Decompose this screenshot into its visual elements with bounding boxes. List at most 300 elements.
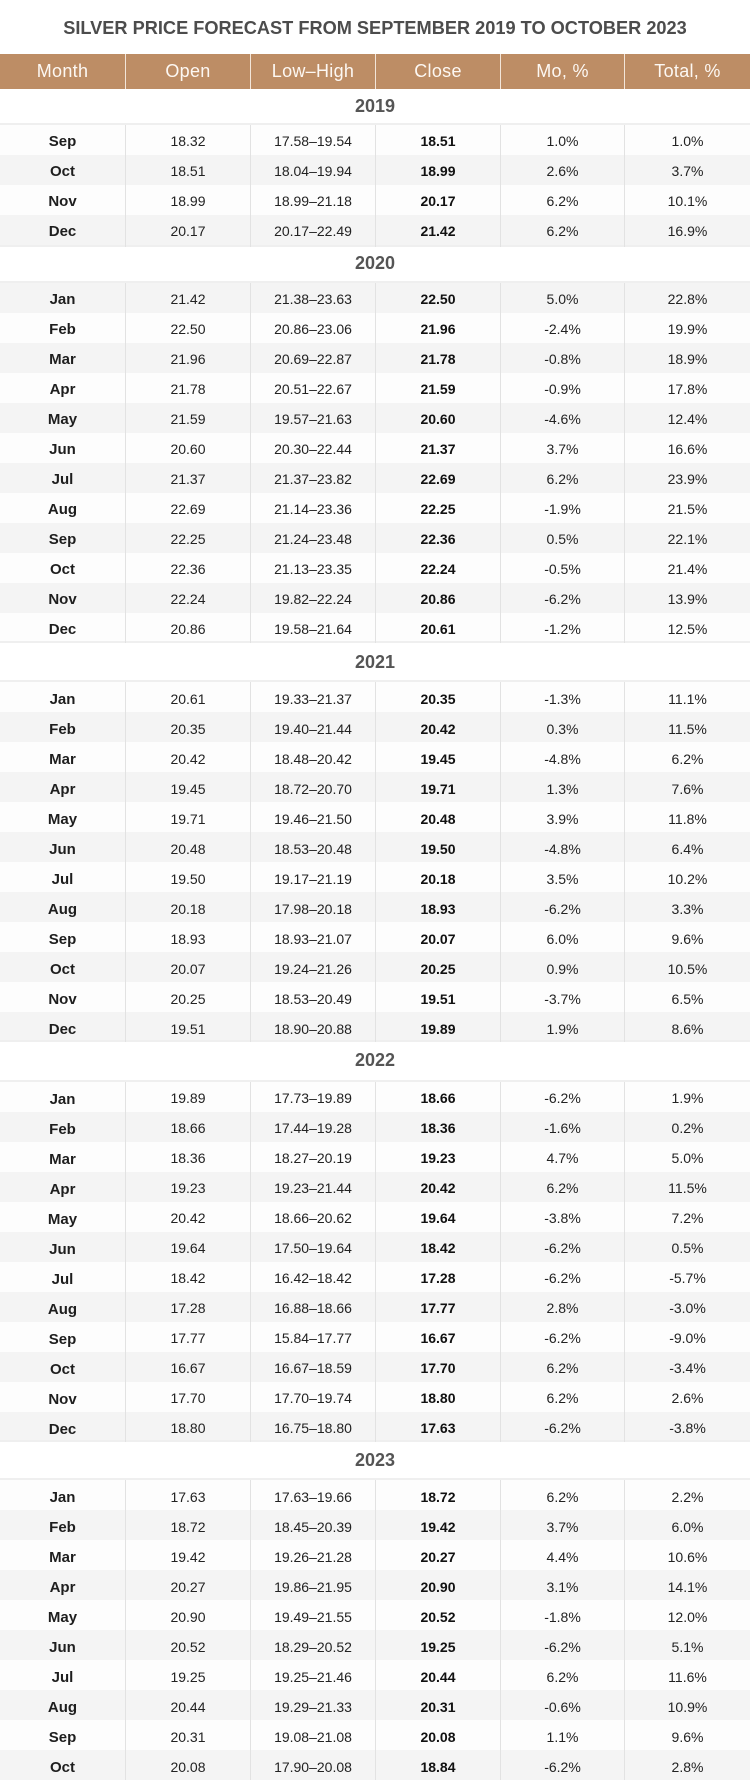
section: 2021 rows: 20.07: [420, 931, 456, 947]
section: 2019 rows: 16.9%: [668, 223, 707, 239]
section: 2023 rows: 19.42: [420, 1519, 456, 1535]
section: 2021 rows: 8.6%: [672, 1021, 703, 1037]
section: 2020 rows: May: [48, 411, 77, 428]
section: 2021 rows: Apr: [50, 781, 75, 798]
section: 2022 rows: 0.5%: [672, 1240, 703, 1256]
section: 2020 rows: 12.5%: [668, 621, 707, 637]
section: 2021 rows: 18.93–21.07: [274, 931, 352, 947]
section: 2019 rows: 18.99: [420, 163, 456, 179]
section: 2021 rows: 19.71: [420, 781, 456, 797]
section: 2020 rows: -0.5%: [544, 561, 581, 577]
section: 2019 rows: 10.1%: [668, 193, 707, 209]
section: 2020 rows: 23.9%: [668, 471, 707, 487]
section: 2023 rows: 20.08: [420, 1729, 456, 1745]
section: 2022 rows: 17.77: [420, 1300, 456, 1316]
section: 2021 rows: 20.35: [420, 691, 456, 707]
section: 2022 rows: 18.80: [420, 1390, 456, 1406]
section: 2022 rows: -3.0%: [669, 1300, 706, 1316]
section: 2019 rows: Sep: [49, 133, 76, 150]
section: 2023 rows: 20.52: [170, 1639, 206, 1655]
section: 2023 rows: 14.1%: [668, 1579, 707, 1595]
section: 2020 rows: 20.69–22.87: [274, 351, 352, 367]
section: 2022 rows: Jan: [50, 1091, 75, 1108]
section: 2021 rows: Mar: [49, 751, 76, 768]
section: 2023 rows: Jul: [52, 1669, 73, 1686]
section: 2020 rows: 19.82–22.24: [274, 591, 352, 607]
section: 2021 rows: Jun: [49, 841, 76, 858]
section: 2023 rows: [0, 1478, 750, 1780]
section: 2022 rows: 16.67: [420, 1330, 456, 1346]
section: 2022 rows: 17.70–19.74: [274, 1390, 352, 1406]
section: 2020 rows: Apr: [50, 381, 75, 398]
section: 2021 rows: 20.42: [170, 751, 206, 767]
section: 2023 rows: 2.2%: [672, 1489, 703, 1505]
section: 2022 rows: May: [48, 1211, 77, 1228]
section: 2021 rows: Dec: [49, 1021, 76, 1038]
section: 2022 rows: 17.77: [170, 1330, 206, 1346]
section: 2021 rows: 0.3%: [547, 721, 578, 737]
section: 2023 rows: 19.86–21.95: [274, 1579, 352, 1595]
section: 2021 rows: 19.17–21.19: [274, 871, 352, 887]
section: 2023 rows: 9.6%: [672, 1729, 703, 1745]
section: 2021 rows: 7.6%: [672, 781, 703, 797]
section: 2021 rows: 11.1%: [668, 691, 707, 707]
section: 2022 rows: 17.28: [420, 1270, 456, 1286]
section: 2020 rows: Jul: [52, 471, 73, 488]
section: 2020 rows: 20.60: [420, 411, 456, 427]
section: 2019 rows: 18.04–19.94: [274, 163, 352, 179]
section: 2021 rows: Feb: [49, 721, 76, 738]
year heading: 2019: [0, 89, 750, 123]
section: 2022 rows: 18.66: [420, 1090, 456, 1106]
title: SILVER PRICE FORECAST FROM SEPTEMBER 2019 TO OCTOBER 2023: [63, 18, 687, 38]
section: 2023 rows: 20.08: [170, 1759, 206, 1775]
section: 2020 rows: 22.25: [420, 501, 456, 517]
year heading: 2019: 2019: [355, 96, 395, 116]
section: 2020 rows: Jun: [49, 441, 76, 458]
section: 2021 rows: 10.2%: [668, 871, 707, 887]
section: 2021 rows: 19.24–21.26: [274, 961, 352, 977]
section: 2020 rows: 22.69: [420, 471, 456, 487]
section: 2019 rows: 18.51: [170, 163, 206, 179]
section: 2023 rows: 18.29–20.52: [274, 1639, 352, 1655]
section: 2022 rows: 17.50–19.64: [274, 1240, 352, 1256]
section: 2023 rows: -1.8%: [544, 1609, 581, 1625]
section: 2021 rows: 10.5%: [668, 961, 707, 977]
section: 2022 rows: 19.64: [420, 1210, 456, 1226]
section: 2023 rows: 18.45–20.39: [274, 1519, 352, 1535]
section: 2022 rows: 16.67: [170, 1360, 206, 1376]
section: 2023 rows: Jun: [49, 1639, 76, 1656]
section: 2020 rows: -4.6%: [544, 411, 581, 427]
section: 2021 rows: 20.42: [420, 721, 456, 737]
section: 2022 rows: Apr: [50, 1181, 75, 1198]
table header: [0, 54, 750, 89]
section: 2023 rows: Apr: [50, 1579, 75, 1596]
section: 2021 rows: 20.25: [170, 991, 206, 1007]
section: 2020 rows: 21.59: [420, 381, 456, 397]
table header: Mo, %: [536, 61, 589, 81]
section: 2021 rows: 19.40–21.44: [274, 721, 352, 737]
section: 2020 rows: -0.8%: [544, 351, 581, 367]
section: 2021 rows: 18.90–20.88: [274, 1021, 352, 1037]
section: 2019 rows: [0, 123, 750, 247]
section: 2023 rows: 4.4%: [547, 1549, 578, 1565]
section: 2020 rows: Mar: [49, 351, 76, 368]
section: 2019 rows: Nov: [48, 193, 77, 210]
section: 2023 rows: 6.2%: [547, 1489, 578, 1505]
section: 2022 rows: 1.9%: [672, 1090, 703, 1106]
section: 2023 rows: 19.26–21.28: [274, 1549, 352, 1565]
section: 2019 rows: 20.17: [420, 193, 456, 209]
section: 2021 rows: 19.71: [170, 811, 206, 827]
section: 2022 rows: Jul: [52, 1271, 73, 1288]
section: 2022 rows: 17.44–19.28: [274, 1120, 352, 1136]
section: 2022 rows: -6.2%: [544, 1420, 581, 1436]
section: 2023 rows: Jan: [50, 1489, 75, 1506]
section: 2022 rows: 17.73–19.89: [274, 1090, 352, 1106]
section: 2020 rows: 22.25: [170, 531, 206, 547]
section: 2020 rows: 21.37–23.82: [274, 471, 352, 487]
section: 2022 rows: 17.63: [420, 1420, 456, 1436]
section: 2020 rows: 20.51–22.67: [274, 381, 352, 397]
section: 2022 rows: 20.42: [420, 1180, 456, 1196]
section: 2023 rows: -6.2%: [544, 1639, 581, 1655]
section: 2020 rows: 21.38–23.63: [274, 291, 352, 307]
section: 2022 rows: 18.80: [170, 1420, 206, 1436]
section: 2020 rows: Oct: [50, 561, 75, 578]
section: 2022 rows: 18.36: [170, 1150, 206, 1166]
section: 2021 rows: Oct: [50, 961, 75, 978]
section: 2019 rows: Dec: [49, 223, 76, 240]
section: 2022 rows: -5.7%: [669, 1270, 706, 1286]
section: 2020 rows: 21.96: [420, 321, 456, 337]
section: 2023 rows: 2.8%: [672, 1759, 703, 1775]
section: 2020 rows: 21.14–23.36: [274, 501, 352, 517]
section: 2022 rows: 18.42: [170, 1270, 206, 1286]
section: 2023 rows: 20.31: [170, 1729, 206, 1745]
section: 2022 rows: -3.8%: [544, 1210, 581, 1226]
section: 2021 rows: Jan: [50, 691, 75, 708]
section: 2023 rows: 20.27: [420, 1549, 456, 1565]
section: 2020 rows: 21.5%: [668, 501, 707, 517]
section: 2022 rows: 16.67–18.59: [274, 1360, 352, 1376]
section: 2023 rows: 20.27: [170, 1579, 206, 1595]
section: 2021 rows: 20.07: [170, 961, 206, 977]
section: 2021 rows: [0, 680, 750, 1042]
section: 2019 rows: 1.0%: [547, 133, 578, 149]
section: 2022 rows: 16.42–18.42: [274, 1270, 352, 1286]
section: 2023 rows: 20.44: [420, 1669, 456, 1685]
section: 2022 rows: 11.5%: [668, 1180, 707, 1196]
section: 2022 rows: -3.4%: [669, 1360, 706, 1376]
section: 2021 rows: -4.8%: [544, 841, 581, 857]
section: 2023 rows: 18.72: [170, 1519, 206, 1535]
section: 2021 rows: 19.46–21.50: [274, 811, 352, 827]
section: 2022 rows: 0.2%: [672, 1120, 703, 1136]
section: 2022 rows: 18.66–20.62: [274, 1210, 352, 1226]
section: 2021 rows: 19.51: [170, 1021, 206, 1037]
section: 2019 rows: 20.17–22.49: [274, 223, 352, 239]
section: 2020 rows: 20.30–22.44: [274, 441, 352, 457]
section: 2021 rows: 19.89: [420, 1021, 456, 1037]
year heading: 2021: [0, 643, 750, 680]
section: 2022 rows: 7.2%: [672, 1210, 703, 1226]
section: 2023 rows: Mar: [49, 1549, 76, 1566]
section: 2020 rows: 21.37: [170, 471, 206, 487]
section: 2022 rows: 18.36: [420, 1120, 456, 1136]
section: 2020 rows: 22.24: [420, 561, 456, 577]
section: 2019 rows: 20.17: [170, 223, 206, 239]
section: 2020 rows: 6.2%: [547, 471, 578, 487]
section: 2022 rows: -1.6%: [544, 1120, 581, 1136]
section: 2022 rows: Feb: [49, 1121, 76, 1138]
section: 2021 rows: 18.93: [170, 931, 206, 947]
section: 2022 rows: 16.88–18.66: [274, 1300, 352, 1316]
section: 2023 rows: 18.72: [420, 1489, 456, 1505]
section: 2020 rows: Feb: [49, 321, 76, 338]
table header: Open: [165, 61, 211, 81]
section: 2020 rows: 12.4%: [668, 411, 707, 427]
section: 2023 rows: -6.2%: [544, 1759, 581, 1775]
section: 2021 rows: 3.3%: [672, 901, 703, 917]
section: 2023 rows: 17.63: [170, 1489, 206, 1505]
section: 2022 rows: Mar: [49, 1151, 76, 1168]
section: 2019 rows: 21.42: [420, 223, 456, 239]
section: 2020 rows: Dec: [49, 621, 76, 638]
section: 2021 rows: Jul: [52, 871, 73, 888]
section: 2021 rows: 11.8%: [668, 811, 707, 827]
section: 2023 rows: 19.42: [170, 1549, 206, 1565]
section: 2021 rows: May: [48, 811, 77, 828]
section: 2021 rows: 6.5%: [672, 991, 703, 1007]
section: 2019 rows: 17.58–19.54: [274, 133, 352, 149]
section: 2022 rows: 20.42: [170, 1210, 206, 1226]
section: 2020 rows: 21.13–23.35: [274, 561, 352, 577]
section: 2021 rows: 3.5%: [547, 871, 578, 887]
section: 2022 rows: 5.0%: [672, 1150, 703, 1166]
section: 2019 rows: 6.2%: [547, 193, 578, 209]
table header: Low–High: [272, 61, 354, 81]
section: 2023 rows: Feb: [49, 1519, 76, 1536]
section: 2021 rows: 20.48: [170, 841, 206, 857]
section: 2020 rows: 22.8%: [668, 291, 707, 307]
section: 2020 rows: 21.42: [170, 291, 206, 307]
section: 2022 rows: 2.6%: [672, 1390, 703, 1406]
section: 2021 rows: 0.9%: [547, 961, 578, 977]
section: 2021 rows: Aug: [48, 901, 77, 918]
section: 2023 rows: Aug: [48, 1699, 77, 1716]
section: 2022 rows: 18.42: [420, 1240, 456, 1256]
section: 2020 rows: 22.24: [170, 591, 206, 607]
section: 2022 rows: 6.2%: [547, 1180, 578, 1196]
section: 2023 rows: 19.25: [420, 1639, 456, 1655]
section: 2020 rows: 21.78: [420, 351, 456, 367]
section: 2022 rows: 17.70: [420, 1360, 456, 1376]
section: 2022 rows: -6.2%: [544, 1090, 581, 1106]
section: 2023 rows: 19.25: [170, 1669, 206, 1685]
section: 2020 rows: 21.96: [170, 351, 206, 367]
section: 2020 rows: -2.4%: [544, 321, 581, 337]
section: 2023 rows: 20.31: [420, 1699, 456, 1715]
section: 2023 rows: 20.90: [420, 1579, 456, 1595]
section: 2022 rows: Nov: [48, 1391, 77, 1408]
section: 2021 rows: 19.50: [170, 871, 206, 887]
section: 2020 rows: 16.6%: [668, 441, 707, 457]
section: 2021 rows: 6.0%: [547, 931, 578, 947]
section: 2022 rows: -6.2%: [544, 1330, 581, 1346]
section: 2023 rows: 18.84: [420, 1759, 456, 1775]
section: 2020 rows: 18.9%: [668, 351, 707, 367]
section: 2020 rows: -6.2%: [544, 591, 581, 607]
section: 2019 rows: 2.6%: [547, 163, 578, 179]
section: 2019 rows: Oct: [50, 163, 75, 180]
section: 2022 rows: 19.23–21.44: [274, 1180, 352, 1196]
section: 2020 rows: 19.57–21.63: [274, 411, 352, 427]
section: 2021 rows: 1.3%: [547, 781, 578, 797]
section: 2022 rows: 19.64: [170, 1240, 206, 1256]
section: 2020 rows: 20.61: [420, 621, 456, 637]
section: 2022 rows: -3.8%: [669, 1420, 706, 1436]
section: 2023 rows: 20.90: [170, 1609, 206, 1625]
section: 2023 rows: 3.1%: [547, 1579, 578, 1595]
section: 2021 rows: 20.25: [420, 961, 456, 977]
section: 2022 rows: 19.89: [170, 1090, 206, 1106]
section: 2020 rows: 22.50: [170, 321, 206, 337]
section: 2021 rows: Nov: [48, 991, 77, 1008]
section: 2022 rows: -9.0%: [669, 1330, 706, 1346]
section: 2023 rows: -0.6%: [544, 1699, 581, 1715]
section: 2020 rows: Sep: [49, 531, 76, 548]
section: 2020 rows: -1.2%: [544, 621, 581, 637]
section: 2021 rows: 11.5%: [668, 721, 707, 737]
table header: Total, %: [654, 61, 721, 81]
section: 2020 rows: 20.86: [170, 621, 206, 637]
section: 2021 rows: 19.33–21.37: [274, 691, 352, 707]
section: 2022 rows: 2.8%: [547, 1300, 578, 1316]
section: 2022 rows: 18.27–20.19: [274, 1150, 352, 1166]
section: 2020 rows: 21.4%: [668, 561, 707, 577]
section: 2021 rows: 20.18: [170, 901, 206, 917]
section: 2023 rows: 19.08–21.08: [274, 1729, 352, 1745]
section: 2023 rows: 1.1%: [547, 1729, 578, 1745]
section: 2021 rows: -3.7%: [544, 991, 581, 1007]
section: 2022 rows: Jun: [49, 1241, 76, 1258]
section: 2022 rows: 15.84–17.77: [274, 1330, 352, 1346]
section: 2021 rows: 19.45: [420, 751, 456, 767]
section: 2020 rows: 20.86–23.06: [274, 321, 352, 337]
year heading: 2022: 2022: [355, 1050, 395, 1070]
section: 2020 rows: -1.9%: [544, 501, 581, 517]
section: 2022 rows: 6.2%: [547, 1390, 578, 1406]
section: 2019 rows: 18.99–21.18: [274, 193, 352, 209]
section: 2021 rows: 20.18: [420, 871, 456, 887]
section: 2023 rows: 10.9%: [668, 1699, 707, 1715]
section: 2023 rows: Oct: [50, 1759, 75, 1776]
section: 2020 rows: 19.9%: [668, 321, 707, 337]
section: 2020 rows: 21.78: [170, 381, 206, 397]
section: 2023 rows: 19.25–21.46: [274, 1669, 352, 1685]
section: 2021 rows: 18.53–20.48: [274, 841, 352, 857]
section: 2020 rows: 3.7%: [547, 441, 578, 457]
section: 2019 rows: 18.99: [170, 193, 206, 209]
section: 2019 rows: 3.7%: [672, 163, 703, 179]
section: 2020 rows: Jan: [50, 291, 75, 308]
section: 2020 rows: 22.36: [420, 531, 456, 547]
section: 2022 rows: [0, 1080, 750, 1442]
section: 2023 rows: 20.52: [420, 1609, 456, 1625]
section: 2019 rows: 18.51: [420, 133, 456, 149]
section: 2020 rows: 19.58–21.64: [274, 621, 352, 637]
section: 2020 rows: Aug: [48, 501, 77, 518]
year heading: 2020: 2020: [355, 253, 395, 273]
section: 2019 rows: 1.0%: [672, 133, 703, 149]
section: 2022 rows: -6.2%: [544, 1270, 581, 1286]
section: 2022 rows: Dec: [49, 1421, 76, 1438]
section: 2022 rows: 17.70: [170, 1390, 206, 1406]
section: 2020 rows: 21.37: [420, 441, 456, 457]
section: 2022 rows: 19.23: [170, 1180, 206, 1196]
section: 2022 rows: 6.2%: [547, 1360, 578, 1376]
section: 2022 rows: 19.23: [420, 1150, 456, 1166]
table header: Month: [37, 61, 88, 81]
section: 2021 rows: -6.2%: [544, 901, 581, 917]
section: 2021 rows: 19.45: [170, 781, 206, 797]
section: 2021 rows: 18.93: [420, 901, 456, 917]
section: 2019 rows: 6.2%: [547, 223, 578, 239]
section: 2021 rows: 1.9%: [547, 1021, 578, 1037]
section: 2023 rows: 3.7%: [547, 1519, 578, 1535]
section: 2020 rows: 20.60: [170, 441, 206, 457]
section: 2023 rows: 6.2%: [547, 1669, 578, 1685]
table header: Close: [414, 61, 462, 81]
section: 2020 rows: 0.5%: [547, 531, 578, 547]
section: 2020 rows: 20.86: [420, 591, 456, 607]
section: 2021 rows: 17.98–20.18: [274, 901, 352, 917]
section: 2019 rows: 18.32: [170, 133, 206, 149]
section: 2021 rows: 6.4%: [672, 841, 703, 857]
section: 2023 rows: 19.29–21.33: [274, 1699, 352, 1715]
section: 2023 rows: 6.0%: [672, 1519, 703, 1535]
year heading: 2021: 2021: [355, 652, 395, 672]
section: 2021 rows: 20.35: [170, 721, 206, 737]
section: 2020 rows: 17.8%: [668, 381, 707, 397]
section: 2023 rows: Sep: [49, 1729, 76, 1746]
section: 2021 rows: 3.9%: [547, 811, 578, 827]
year heading: 2022: [0, 1042, 750, 1079]
section: 2023 rows: 17.63–19.66: [274, 1489, 352, 1505]
section: 2023 rows: 10.6%: [668, 1549, 707, 1565]
year heading: 2020: [0, 247, 750, 281]
section: 2020 rows: 22.36: [170, 561, 206, 577]
section: 2021 rows: Sep: [49, 931, 76, 948]
section: 2021 rows: 18.53–20.49: [274, 991, 352, 1007]
section: 2022 rows: 18.66: [170, 1120, 206, 1136]
section: 2020 rows: 22.1%: [668, 531, 707, 547]
section: 2022 rows: 17.28: [170, 1300, 206, 1316]
section: 2020 rows: 13.9%: [668, 591, 707, 607]
section: 2022 rows: Aug: [48, 1301, 77, 1318]
section: 2022 rows: 16.75–18.80: [274, 1420, 352, 1436]
year heading: 2023: 2023: [355, 1450, 395, 1470]
section: 2020 rows: 21.59: [170, 411, 206, 427]
section: 2023 rows: 20.44: [170, 1699, 206, 1715]
section: 2022 rows: Oct: [50, 1361, 75, 1378]
section: 2022 rows: Sep: [49, 1331, 76, 1348]
section: 2023 rows: 5.1%: [672, 1639, 703, 1655]
section: 2020 rows: [0, 281, 750, 643]
section: 2021 rows: 19.50: [420, 841, 456, 857]
